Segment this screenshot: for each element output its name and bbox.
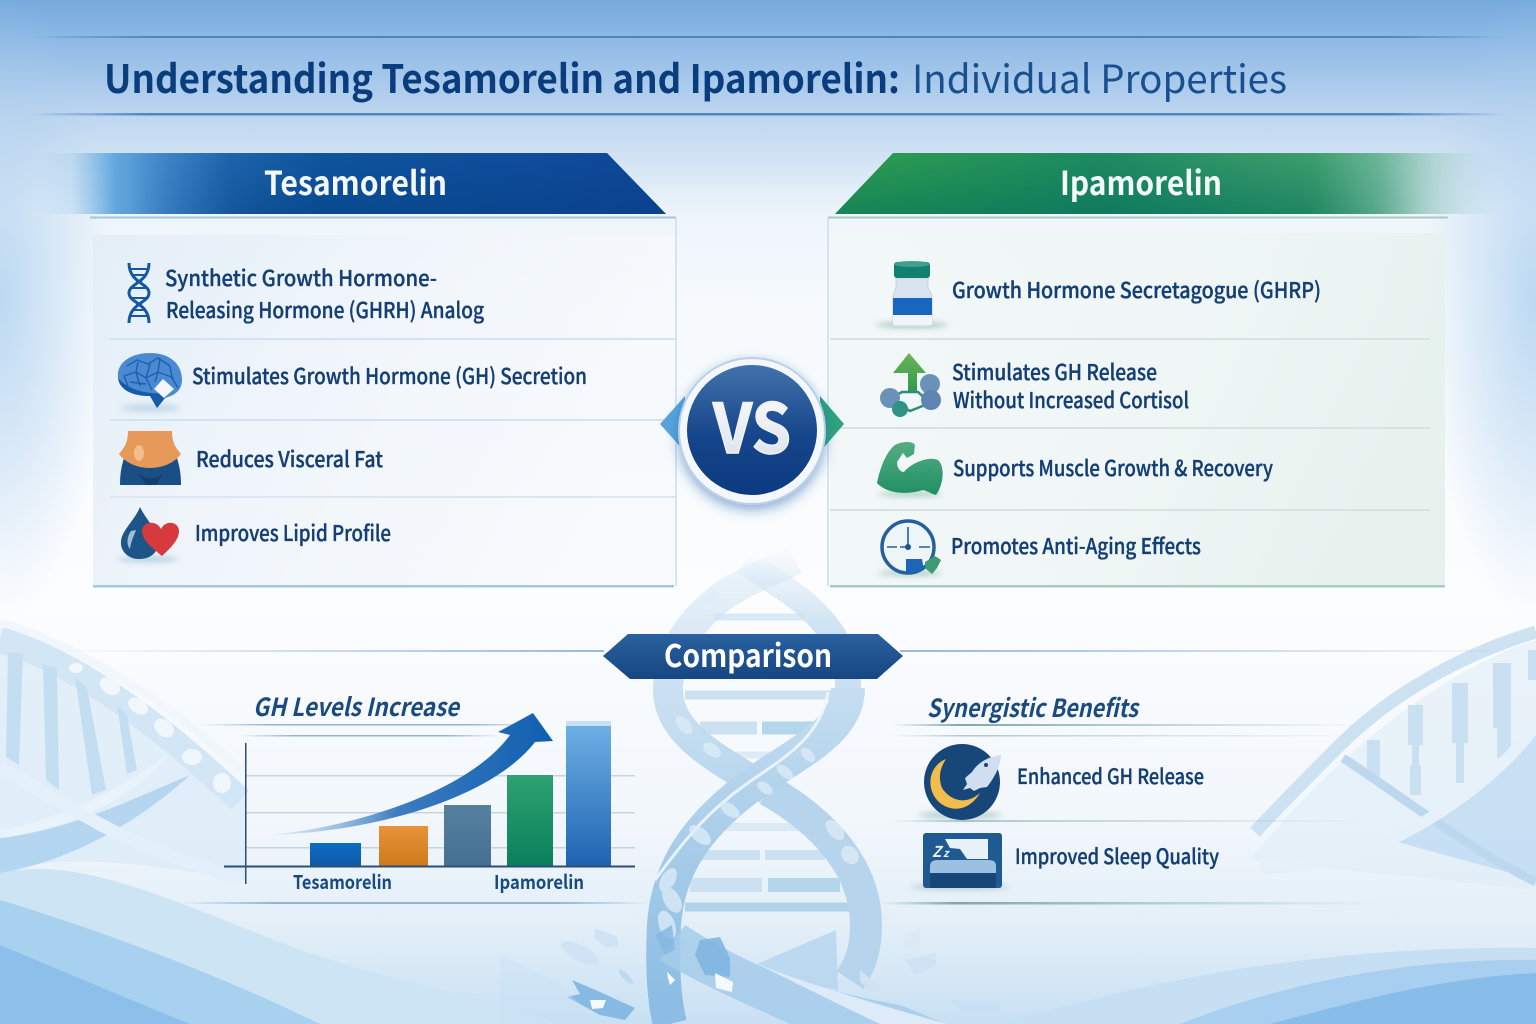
- right pointer: [820, 396, 844, 452]
- item: synthetic GHRH analog: Synthetic Growth Hormone-: [165, 261, 437, 293]
- item: improved sleep quality: [910, 833, 1219, 890]
- header ribbon: Ipamorelin: [828, 153, 1500, 218]
- icon: drop and heart: [118, 507, 179, 562]
- item: reduces visceral fat: [119, 431, 383, 485]
- item: improved sleep quality: Improved Sleep Quality: [1015, 841, 1219, 871]
- header ribbon: Tesamorelin: Tesamorelin: [264, 157, 447, 205]
- card: [93, 235, 674, 586]
- item: enhanced GH release: [918, 744, 1204, 820]
- item: enhanced GH release: Enhanced GH Release: [1017, 761, 1204, 791]
- trend arrow: [270, 713, 553, 835]
- Comparison section heading: Comparison: [664, 631, 832, 676]
- header ribbon: Tesamorelin: [40, 153, 676, 218]
- item: stimulates GH secretion: [118, 353, 587, 412]
- icon: vial: [876, 261, 948, 328]
- header ribbon: Ipamorelin: Ipamorelin: [1060, 157, 1222, 205]
- item: reduces visceral fat: Reduces Visceral Fat: [196, 442, 383, 474]
- icon: waist: [119, 431, 181, 485]
- item: muscle growth: Supports Muscle Growth & Recovery: [953, 451, 1273, 483]
- item: anti-aging: [878, 521, 1201, 576]
- decorative DNA: left: [0, 622, 245, 880]
- title block: [30, 36, 1506, 116]
- central DNA helix: [654, 560, 866, 1024]
- item: improves lipid profile: [118, 507, 391, 562]
- chart title: GH Levels Increase: [253, 688, 461, 724]
- title: regular part: Individual Properties: [912, 49, 1287, 105]
- item: improves lipid profile: Improves Lipid Profile: [195, 516, 391, 548]
- panel: Tesamorelin: [40, 153, 677, 588]
- item: stimulates GH release: Stimulates GH Release: [952, 355, 1157, 387]
- right bottom waves: [1000, 948, 1536, 1024]
- chart: GH Levels Increase: Ipamorelin: [494, 868, 584, 895]
- bar labels: Tesamorelin: [293, 868, 392, 895]
- panel: Ipamorelin: [827, 153, 1500, 588]
- item: stimulates GH secretion: Stimulates Growth Hormone (GH) Secretion: [192, 359, 587, 391]
- x axis: [224, 866, 635, 868]
- icon: brain: [118, 353, 182, 412]
- item: synthetic GHRH analog: [129, 261, 484, 325]
- icon: bed: z: [943, 845, 950, 861]
- item: stimulates GH release: [880, 353, 1189, 417]
- item: muscle growth: [877, 442, 1273, 497]
- y axis: [245, 743, 246, 884]
- item: synthetic GHRH analog: Releasing Hormone (GHRH) Analog: [166, 293, 484, 325]
- item: stimulates GH release: Without Increased Cortisol: [953, 383, 1189, 415]
- chart: GH Levels Increase: [180, 688, 650, 904]
- icon: moon and rocket: [918, 744, 1002, 820]
- bars: [310, 721, 611, 866]
- Comparison section heading: [59, 631, 1536, 679]
- icon: molecule with arrow: [880, 353, 941, 417]
- icon: clock: [878, 521, 942, 576]
- icon: flexed arm: [877, 442, 943, 497]
- VS badge: [660, 358, 844, 504]
- icon: bed: [910, 833, 1010, 890]
- item: GH secretagogue: Growth Hormone Secretagogue (GHRP): [952, 273, 1321, 305]
- VS badge: VS: [712, 374, 791, 473]
- title: bold part: Understanding Tesamorelin and Ipamorelin:: [104, 49, 900, 105]
- item: GH secretagogue: [876, 261, 1321, 328]
- heading: Synergistic Benefits: [927, 689, 1140, 725]
- item: anti-aging: Promotes Anti-Aging Effects: [951, 529, 1201, 561]
- left pointer: [660, 396, 685, 452]
- icon: DNA: [129, 263, 149, 323]
- panel: Synergistic Benefits: [880, 689, 1380, 904]
- decorative DNA: right: [1250, 632, 1536, 890]
- bottom swirl: [500, 925, 1000, 1024]
- icon: bed: Z: [932, 841, 944, 862]
- left bottom waves: [0, 869, 560, 1024]
- card: [830, 233, 1445, 587]
